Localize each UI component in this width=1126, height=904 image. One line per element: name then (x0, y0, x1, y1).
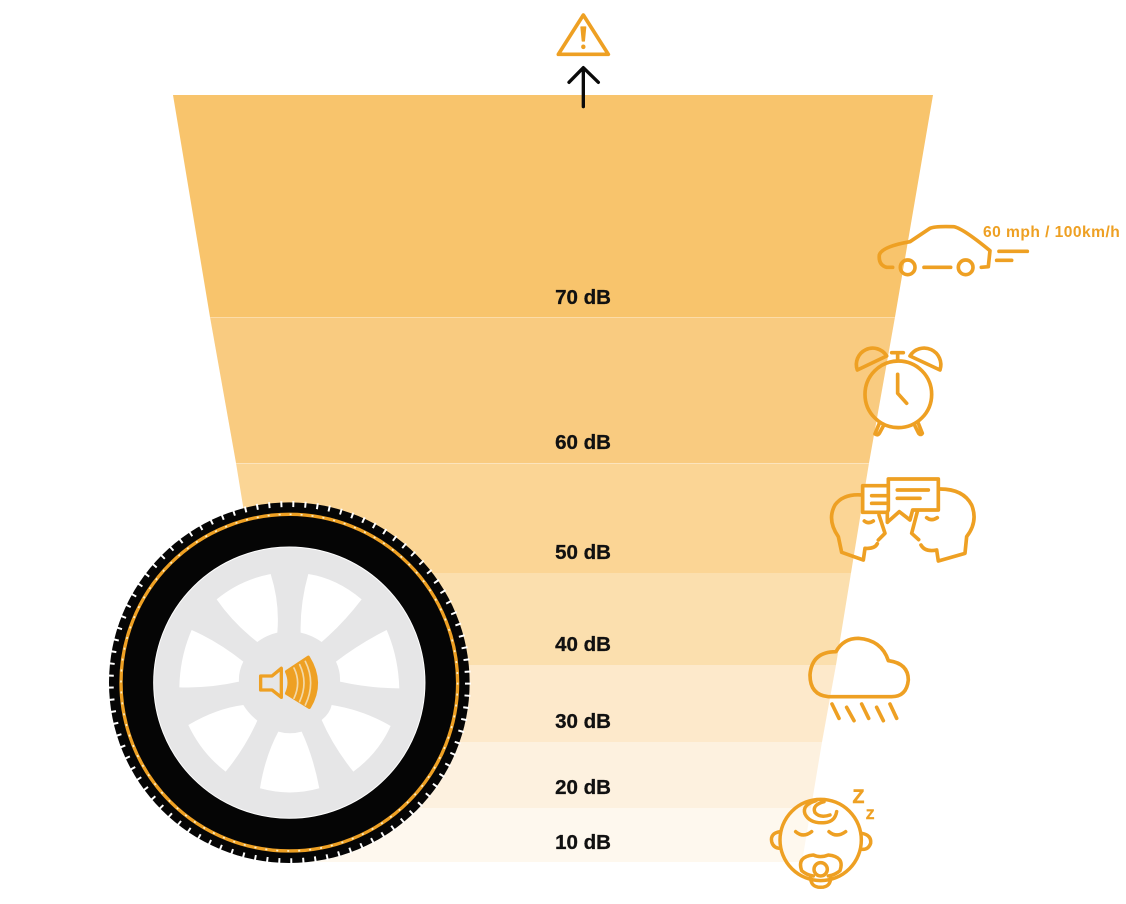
band: 50 dB (236, 463, 869, 573)
label: 30 dB: 30 dB (555, 710, 611, 733)
rim (154, 547, 425, 818)
orange ring (121, 514, 458, 851)
rim spoke windows (179, 574, 399, 792)
tread notches (111, 504, 468, 861)
icon: rain cloud (810, 638, 908, 721)
icon: two people talking (832, 479, 974, 561)
band: 70 dB (173, 95, 933, 317)
label: 50 dB: 50 dB (555, 541, 611, 564)
label: 60 dB: 60 dB (555, 431, 611, 454)
arrow: upward beyond scale (569, 68, 598, 107)
band: 60 dB (210, 317, 895, 463)
label: 20 dB: 20 dB (555, 776, 611, 799)
icon: warning triangle (558, 15, 608, 54)
letter z: Z (866, 807, 874, 822)
speed label: 60 mph / 100km/h (983, 224, 1120, 241)
decibel labels (555, 286, 611, 854)
label: 40 dB: 40 dB (555, 633, 611, 656)
ring stitching (121, 514, 458, 851)
band: 20 dB (283, 742, 822, 808)
icon: sleeping baby (771, 799, 871, 887)
wheel (109, 502, 470, 863)
letter Z: Z (852, 786, 864, 808)
tyre (109, 502, 470, 863)
icon: speaker with sound waves (261, 657, 316, 707)
icon: alarm clock (856, 348, 941, 435)
icon: car with speed lines (879, 227, 1027, 275)
band: 10 dB (295, 808, 811, 862)
funnel chart (173, 95, 933, 862)
band: 40 dB (254, 573, 851, 665)
band: 30 dB (270, 665, 836, 742)
label: 10 dB: 10 dB (555, 831, 611, 854)
label: 70 dB: 70 dB (555, 286, 611, 309)
icon: sleep letters (852, 786, 874, 822)
